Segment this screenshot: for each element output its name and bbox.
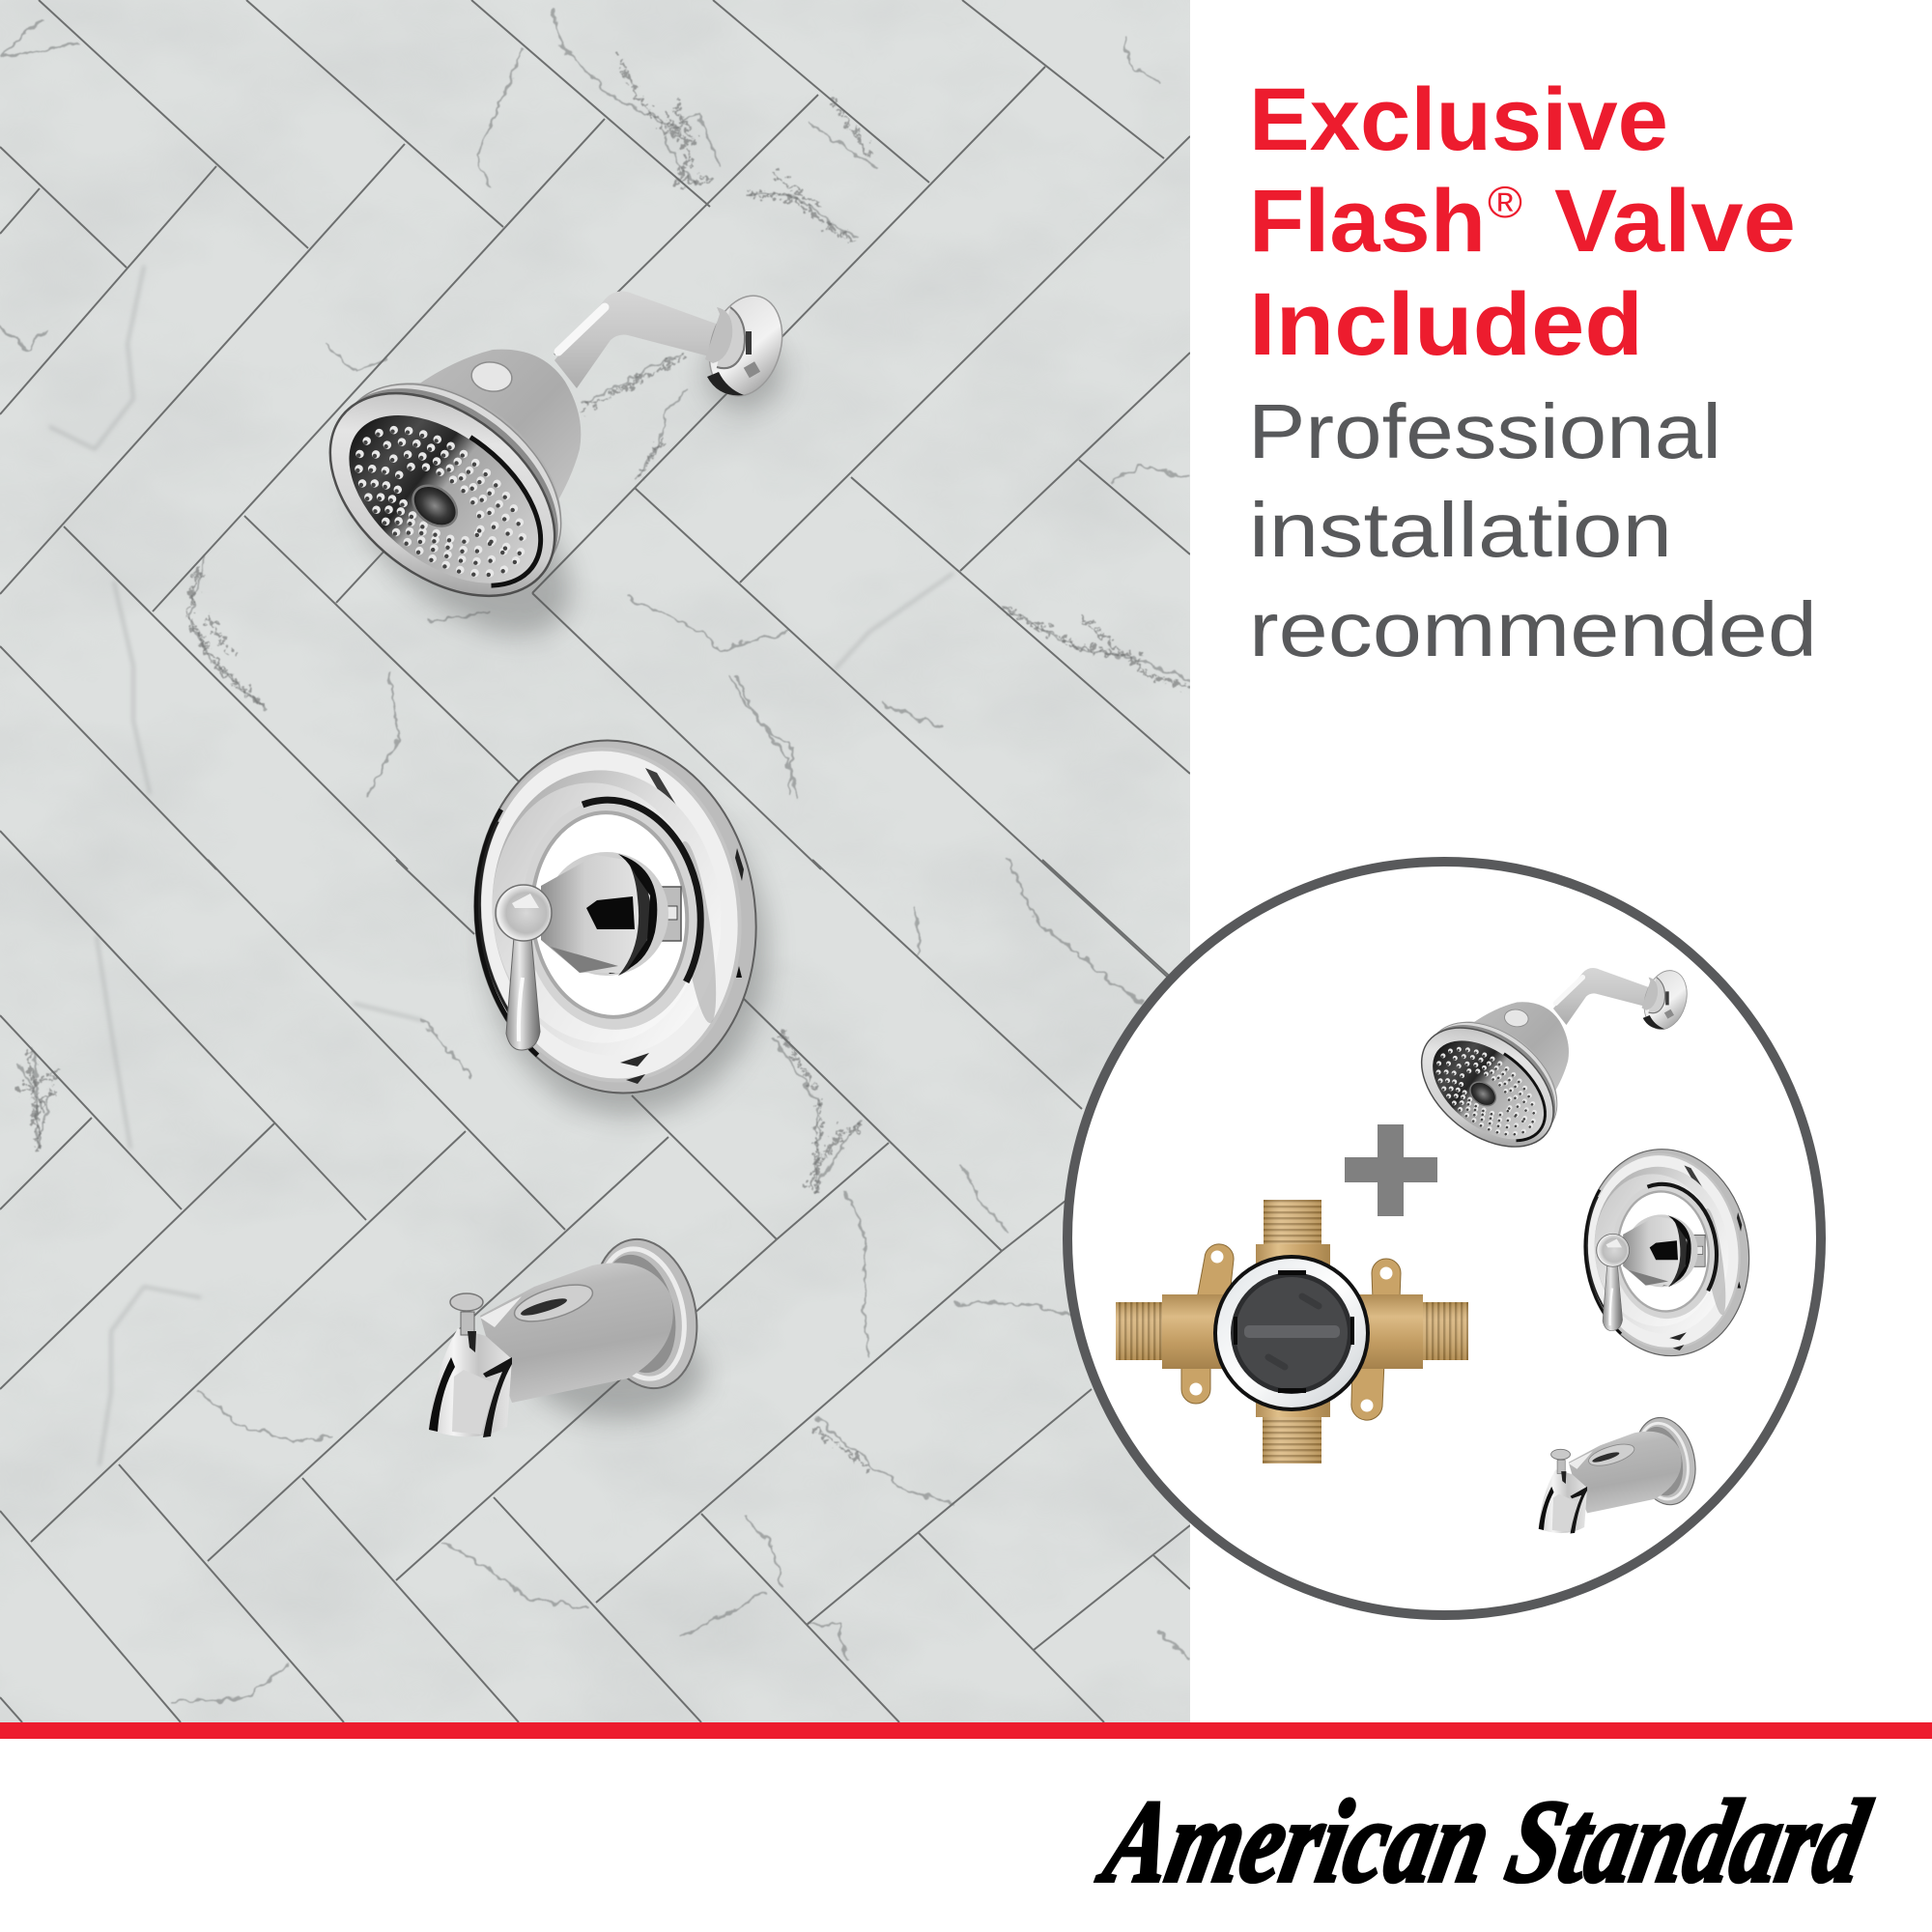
valve plug and chrome ring xyxy=(1213,1255,1370,1411)
text: professional installation recommended xyxy=(1248,388,1817,672)
heading: exclusive flash valve included: ® xyxy=(1488,177,1522,227)
valve body xyxy=(1162,1244,1423,1417)
text: professional installation recommended: installation xyxy=(1249,487,1672,573)
bell body xyxy=(415,350,581,510)
spout body xyxy=(480,1263,673,1403)
inner ring xyxy=(513,792,710,1037)
plus sign xyxy=(1345,1124,1437,1216)
fixture shadows xyxy=(323,333,782,1420)
spray nozzles xyxy=(332,402,548,603)
red divider bar xyxy=(0,1722,1932,1739)
shower arm xyxy=(554,292,726,388)
text: professional installation recommended: recommended xyxy=(1249,586,1817,672)
outer escutcheon xyxy=(455,724,776,1109)
tub spout xyxy=(429,1230,710,1437)
inset: tub spout xyxy=(1539,1412,1703,1533)
heading: exclusive flash valve included: Flash xyxy=(1249,172,1486,270)
trim plate and handle xyxy=(455,724,776,1109)
spout nose xyxy=(429,1328,512,1437)
heading: exclusive flash valve included: Valve xyxy=(1554,172,1796,270)
inset circle xyxy=(1067,862,1821,1615)
inset: trim plate xyxy=(1573,1140,1761,1365)
icon: brass rough-in valve xyxy=(1116,1200,1468,1463)
shower head xyxy=(292,287,793,637)
panel: marble herringbone wall xyxy=(0,0,1190,1722)
text: professional installation recommended: Professional xyxy=(1248,388,1721,474)
heading: exclusive flash valve included: Exclusive xyxy=(1249,71,1668,169)
spout highlight xyxy=(480,1277,597,1329)
shower face xyxy=(292,339,603,637)
spout flange xyxy=(581,1230,710,1398)
heading: exclusive flash valve included xyxy=(1249,71,1796,374)
handle cone xyxy=(541,852,681,976)
diverter knob xyxy=(450,1293,483,1352)
inset: shower head xyxy=(1399,965,1693,1171)
bell button xyxy=(469,359,514,394)
handle lever xyxy=(496,885,552,1050)
threaded ports xyxy=(1116,1200,1468,1463)
heading: exclusive flash valve included: Included xyxy=(1249,275,1643,374)
wall flange xyxy=(698,287,793,405)
valve ears xyxy=(1181,1244,1401,1420)
